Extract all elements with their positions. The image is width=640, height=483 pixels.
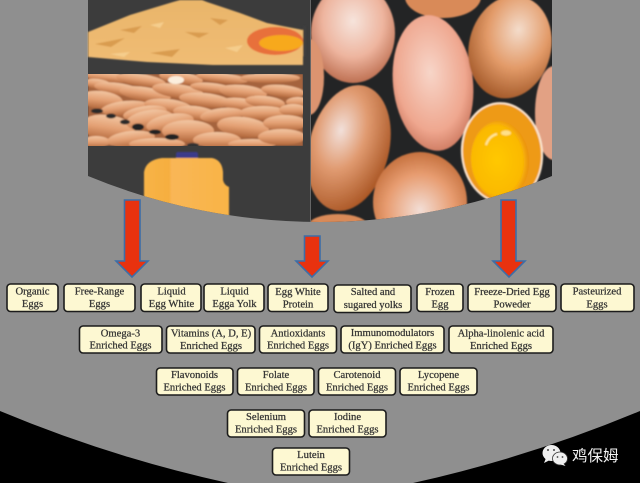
box: Folate Enriched Eggs: Enriched Eggs [245,382,307,394]
box: Lutein Enriched Eggs: Enriched Eggs [280,462,342,474]
box: Omega-3 Enriched Eggs: Omega-3 [101,328,140,340]
box: Lycopene Enriched Eggs: Lycopene [418,370,459,381]
box: Vitamins (A, D, E) Enriched Eggs: Vitamins (A, D, E) [171,328,252,340]
box: Frozen Egg: Egg [431,300,449,310]
box: Antioxidants Enriched Eggs: Enriched Eggs [267,340,329,352]
photo: egg trays [88,74,303,146]
box: Selenium Enriched Eggs [228,410,304,437]
box: Egg White Protein: Egg White [275,287,321,298]
box: Lycopene Enriched Eggs [400,368,477,395]
box: Flavonoids Enriched Eggs: Enriched Eggs [163,382,226,394]
box: Liquid Egga Yolk [204,284,264,312]
box: Carotenoid Enriched Eggs [318,368,396,395]
box: Liquid Egga Yolk: Egga Yolk [212,299,257,310]
box: Liquid Egga Yolk: Liquid [220,286,249,298]
box: Selenium Enriched Eggs: Enriched Eggs [235,424,297,436]
box: Iodine Enriched Eggs [309,410,386,437]
box: Iodine Enriched Eggs: Enriched Eggs [316,424,379,436]
box: Freeze-Dried Egg Poweder [468,284,556,312]
box: Free-Range Eggs [64,284,135,312]
box: Liquid Egg White [141,284,201,312]
box: Frozen Egg: Frozen [425,287,455,298]
box: Pasteurized Eggs [561,284,634,312]
arrow: Free-Range Eggs [116,200,148,277]
box: Lycopene Enriched Eggs: Enriched Eggs [407,382,470,394]
box: Alpha-linolenic acid Enriched Eggs: Alpha-linolenic acid [458,328,545,340]
box: Free-Range Eggs: Eggs [89,299,110,310]
box: Selenium Enriched Eggs: Selenium [246,412,287,423]
box: Liquid Egg White: Liquid [157,286,186,298]
box: Flavonoids Enriched Eggs [156,368,233,395]
box: Salted and sugared yolks: Salted and [351,287,396,298]
box: Frozen Egg [417,284,463,312]
box: Immunomodulators (IgY) Enriched Eggs: Immunomodulators [351,328,434,339]
box: Organic Eggs: Organic [16,286,50,298]
box: Folate Enriched Eggs [238,368,314,395]
box: Salted and sugared yolks: sugared yolks [344,300,402,311]
box: Pasteurized Eggs: Eggs [586,300,608,310]
box: Egg White Protein [268,284,328,312]
box: Antioxidants Enriched Eggs [260,326,336,353]
box: Omega-3 Enriched Eggs: Enriched Eggs [89,340,152,352]
box: Iodine Enriched Eggs: Iodine [334,412,361,423]
product label boxes [7,284,634,475]
photo: egg powder pile [88,0,306,65]
watermark text: 鸡保姆 [572,447,619,465]
box: Flavonoids Enriched Eggs: Flavonoids [171,370,218,381]
box: Egg White Protein: Protein [283,300,314,310]
box: Salted and sugared yolks [334,285,411,312]
box: Antioxidants Enriched Eggs: Antioxidants [271,328,325,340]
box: Vitamins (A, D, E) Enriched Eggs [166,326,255,353]
box: Vitamins (A, D, E) Enriched Eggs: Enriched Eggs [180,341,242,352]
box: Alpha-linolenic acid Enriched Eggs: Enriched Eggs [470,341,532,352]
box: Lutein Enriched Eggs [272,448,350,475]
box: Organic Eggs [7,284,58,312]
arrow: Egg White Protein [296,236,328,277]
box: Lutein Enriched Eggs: Lutein [297,450,326,461]
box: Alpha-linolenic acid Enriched Eggs [449,326,553,353]
box: Freeze-Dried Egg Poweder: Freeze-Dried Egg [474,287,550,298]
dark panel with product photos [87,0,552,222]
photo: liquid egg bottle [144,152,229,225]
photo: brown eggs [311,0,552,222]
box: Immunomodulators (IgY) Enriched Eggs [341,326,444,353]
box: Liquid Egg White: Egg White [149,299,195,310]
box: Carotenoid Enriched Eggs: Enriched Eggs [326,382,388,394]
box: Free-Range Eggs: Free-Range [75,286,125,298]
box: Folate Enriched Eggs: Folate [263,370,290,381]
box: Carotenoid Enriched Eggs: Carotenoid [333,370,381,381]
icon: chat watermark [542,445,568,466]
box: Immunomodulators (IgY) Enriched Eggs: (IgY) Enriched Eggs [348,340,437,352]
box: Pasteurized Eggs: Pasteurized [573,286,622,298]
box: Freeze-Dried Egg Poweder: Poweder [493,300,531,310]
arrow: Freeze-Dried Egg Powder [493,200,525,277]
box: Organic Eggs: Eggs [22,299,43,310]
box: Omega-3 Enriched Eggs [80,326,162,353]
